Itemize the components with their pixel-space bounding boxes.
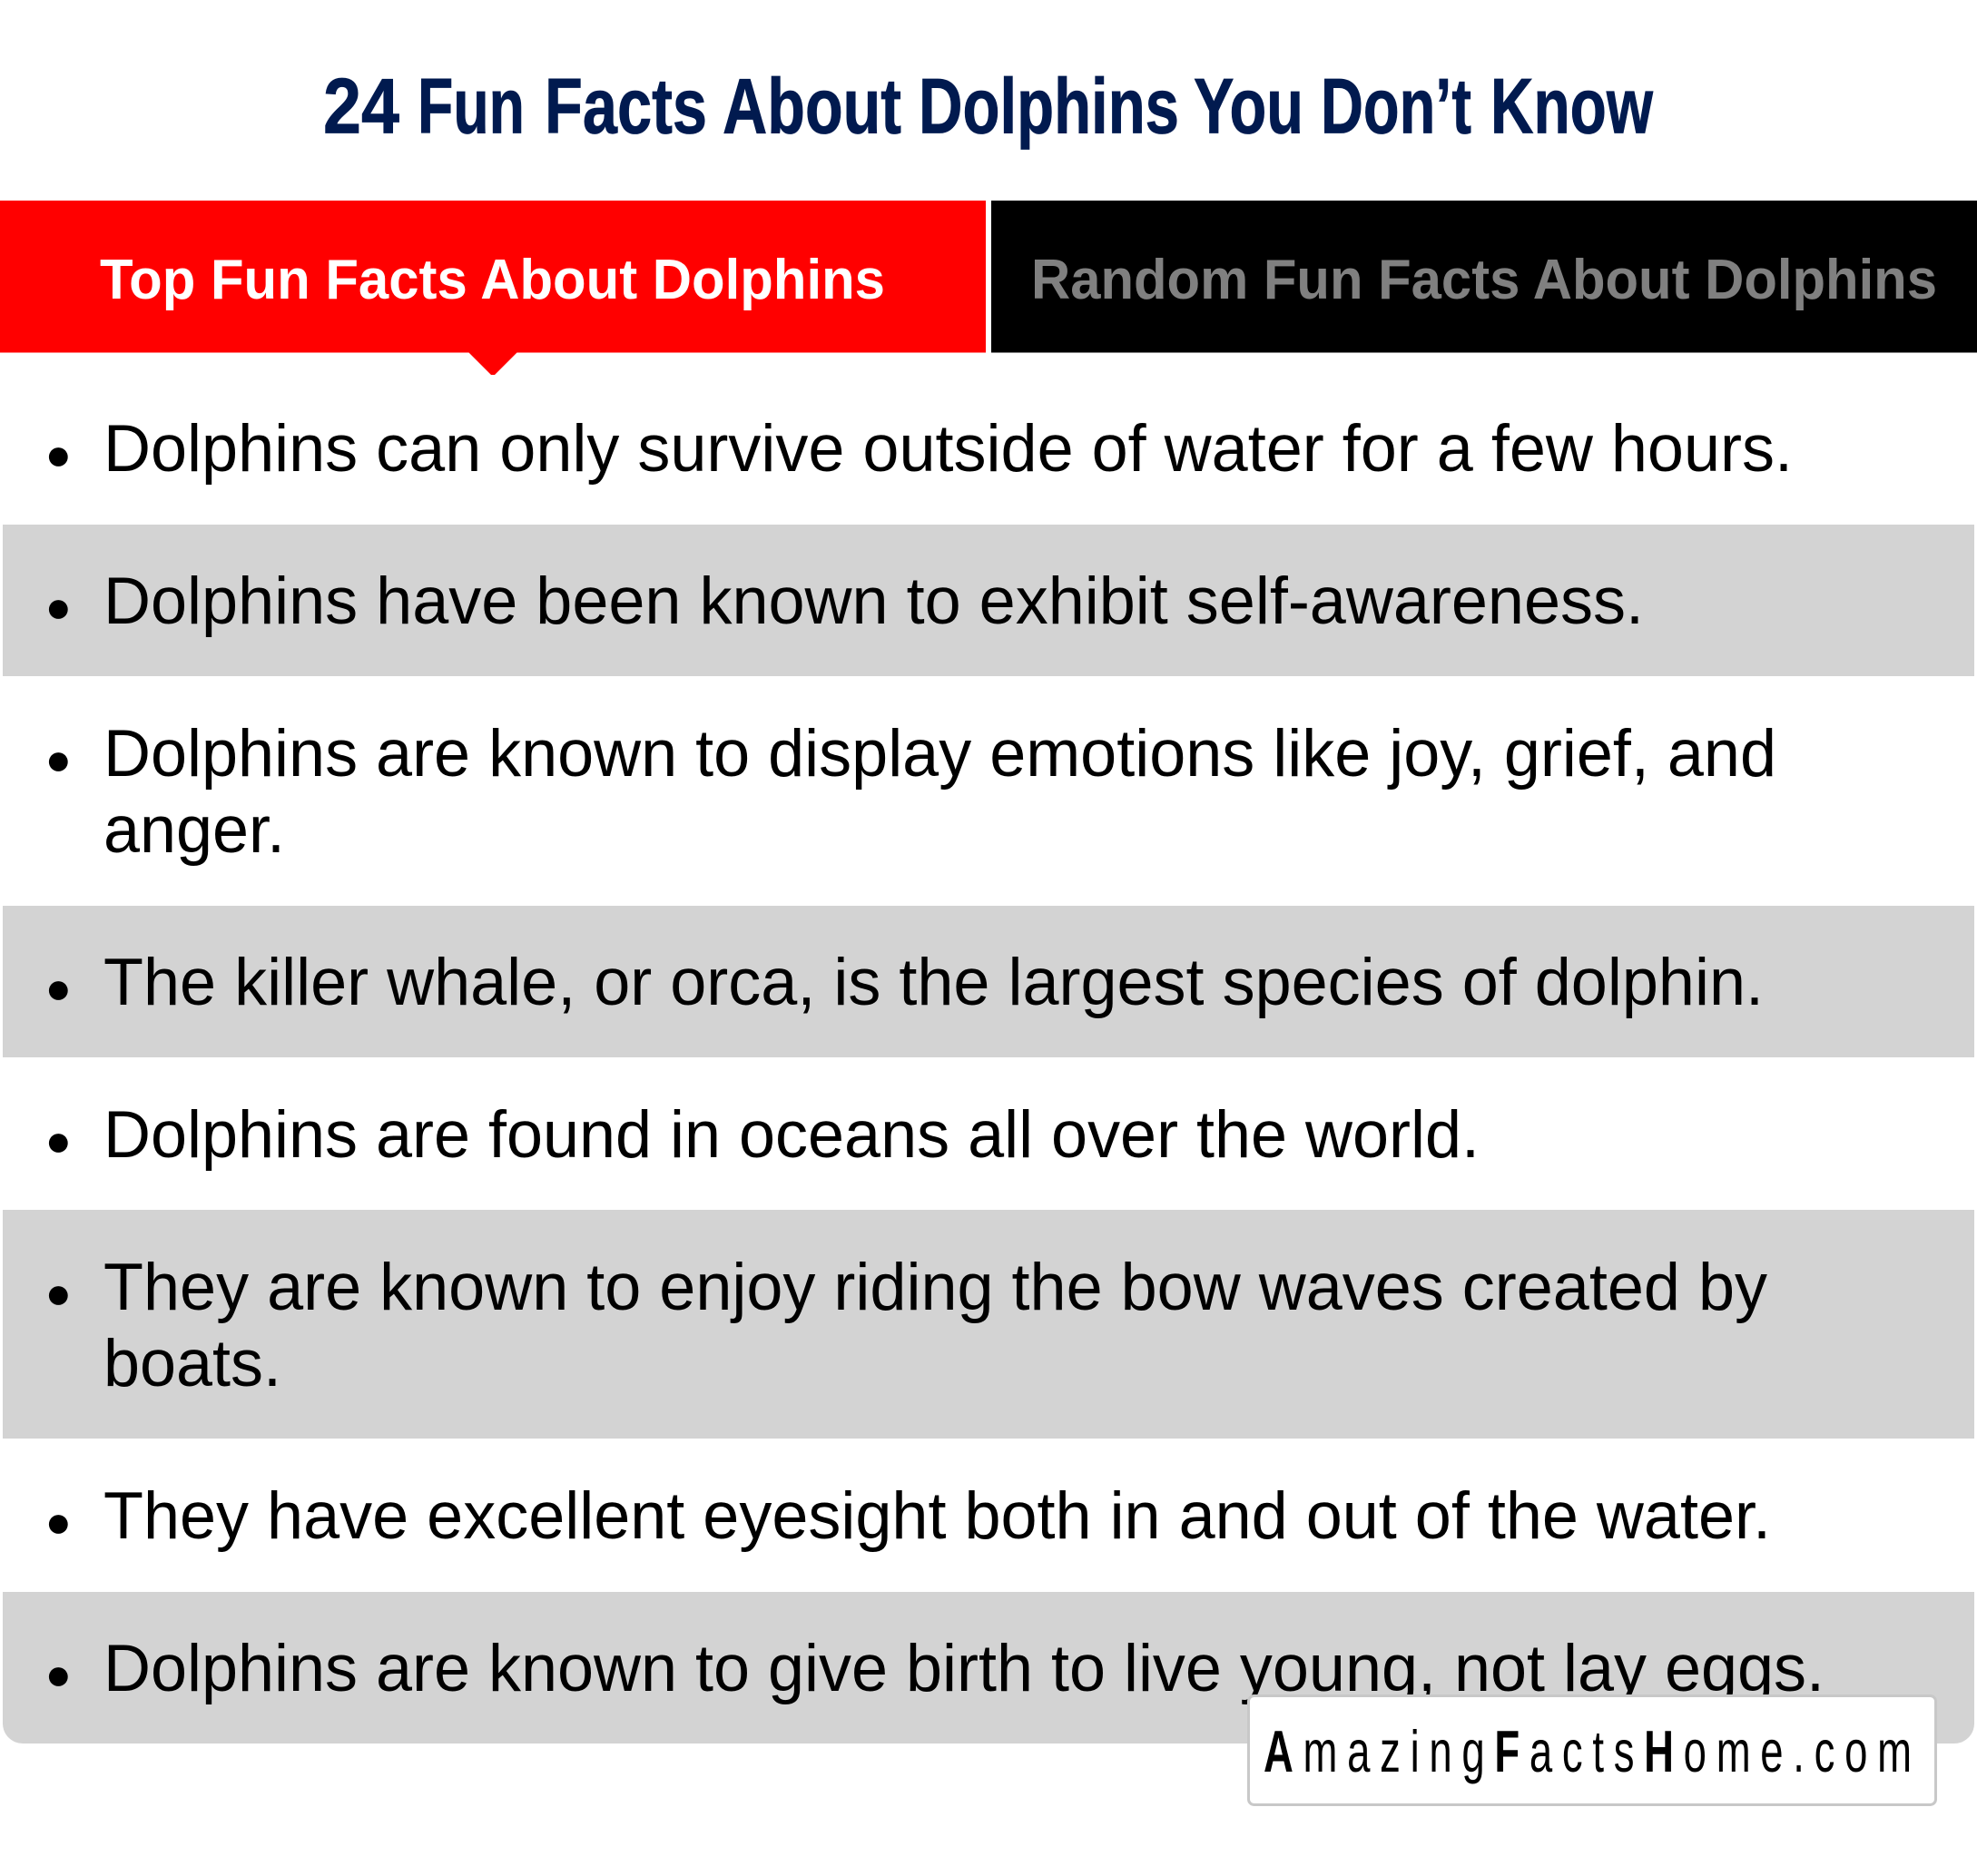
tab: random fun facts (inactive) (991, 201, 1977, 352)
fact 2 (3, 525, 1974, 676)
fact 4 (3, 906, 1974, 1057)
watermark badge (1249, 1695, 1935, 1804)
fact 8 (3, 1592, 1974, 1743)
fact 8: Dolphins are known to give birth to live young, not lay eggs. (103, 1632, 1825, 1705)
title: 24 (323, 64, 399, 151)
fact 3: anger. (103, 793, 285, 867)
tab: random fun facts (inactive): Random Fun Facts About Dolphins (1031, 249, 1937, 311)
title: Know (1490, 64, 1654, 151)
tab: top fun facts (active): Top Fun Facts About Dolphins (100, 249, 885, 311)
fact 4: The killer whale, or orca, is the largest species of dolphin. (103, 946, 1764, 1019)
watermark badge: AmazingFactsHome.com (1264, 1718, 1912, 1784)
title (323, 64, 1654, 151)
title: You (1194, 64, 1303, 151)
fact 3 (49, 717, 1776, 867)
tab: top fun facts (active) (0, 201, 986, 375)
fact 6: They are known to enjoy riding the bow waves created by (103, 1251, 1767, 1324)
fact 6 (3, 1210, 1974, 1439)
fact 1: Dolphins can only survive outside of water for a few hours. (103, 412, 1793, 486)
fact 2: Dolphins have been known to exhibit self-awareness. (103, 565, 1644, 638)
title: Dolphins (919, 64, 1179, 151)
fact 6: boats. (103, 1327, 281, 1400)
title: About (723, 64, 901, 151)
fact 5: Dolphins are found in oceans all over the world. (103, 1098, 1480, 1172)
title: Facts (545, 64, 707, 151)
title: Don’t (1321, 64, 1471, 151)
title: Fun (418, 64, 525, 151)
fact 3: Dolphins are known to display emotions like joy, grief, and (103, 717, 1776, 791)
fact 7: They have excellent eyesight both in and out of the water. (103, 1479, 1771, 1553)
